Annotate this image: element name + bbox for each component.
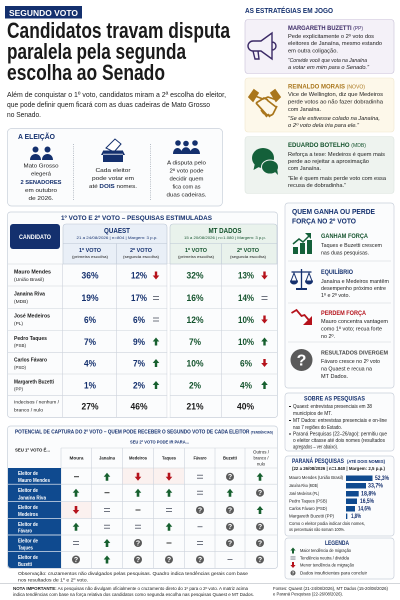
matrix row: eleitor de Mauro Mendes: ?: [228, 474, 232, 481]
panel: Margareth Buzetti: MARGARETH BUZETTI (PP): [288, 25, 363, 32]
panel: paraná pesquisas: (ATÉ DOIS NOMES): [347, 459, 386, 464]
icon: megaphone: [248, 33, 276, 59]
text: dois senadores: [20, 164, 62, 202]
row labels: Mauro Mendes: [18, 478, 50, 484]
matrix row: eleitor de Taques: ?: [228, 540, 232, 548]
ganham força: Taques e Buzetti crescem: [321, 243, 382, 249]
bar chart: Janaína Riva (MDB): [289, 483, 318, 489]
icon: question mark: [290, 349, 312, 371]
row: Carlos Fávaro: [14, 358, 268, 370]
panel: paraná pesquisas: [285, 456, 394, 536]
row: José Medeiros: 12%: [186, 315, 204, 326]
panel: sobre as pesquisas: Paraná Pesquisas (22–26/ago): permitiu que: [293, 432, 387, 438]
panel: paraná pesquisas: (22 a 26/08/2026 | n=1.840 | Margem: 2,5 p.p.): [292, 466, 385, 471]
sources: e Paraná Pesquisas (22-26/08/2026).: [273, 592, 343, 596]
important note: indica tendências com base na força relativa dos candidatos como segunda escolha nas pesquisas Quaest e MT Dados.: [13, 592, 254, 597]
panel: sobre as pesquisas: [285, 393, 394, 451]
text: a disputa: 2º voto pode: [170, 168, 204, 174]
text: a disputa: decidir quem: [170, 176, 204, 182]
row: Janaina Riva: 14%: [238, 293, 254, 304]
row: Pedro Taques: 10%: [238, 337, 254, 348]
observation note: nos resultados de 1º e 2º voto.: [18, 578, 88, 582]
panel: sobre as pesquisas: Quaest: entrevistas presenciais em 38: [293, 404, 372, 410]
matrix row: eleitor de Taques: ?: [136, 540, 140, 548]
observation note: Observação: cruzamentos não divulgados pelas pesquisas. Quadro indica tendências gerais com base: [18, 571, 248, 576]
ganham força: [321, 234, 382, 256]
quaest header: 1º VOTO: [79, 248, 102, 254]
matrix row: eleitor de Taques: [73, 539, 264, 548]
panel: Reinaldo Morais: com Janaína.: [288, 107, 321, 113]
column headers: Fávaro: [194, 456, 207, 460]
panel: Eduardo Botelho: EDUARDO BOTELHO (MDB): [288, 142, 366, 149]
matrix subheading: SEU 2º VOTO PODE IR PARA...: [130, 440, 189, 445]
text: cada eleitor: até DOIS nomes.: [89, 184, 137, 190]
panel: Eduardo Botelho: recusa de dobradinha.”: [288, 183, 346, 189]
row: José Medeiros: José Medeiros: [14, 314, 50, 320]
row: Carlos Fávaro: Carlos Fávaro: [14, 358, 47, 364]
row: Margareth Buzetti: 2%: [189, 380, 201, 391]
matrix row: eleitor de Buzetti: [72, 556, 264, 564]
bar chart: 52,3%: [375, 476, 390, 482]
row: Mauro Mendes: 12%: [131, 271, 147, 282]
panel: sobre as pesquisas: MT Dados: entrevistas presenciais e on-line: [293, 418, 387, 424]
bar chart: Pedro Taques (PSB): [289, 498, 327, 504]
row: Pedro Taques: Pedro Taques: [14, 336, 47, 342]
column headers: Janaína: [99, 456, 115, 460]
bar chart: José Medeiros (PL): [289, 491, 319, 497]
bar chart: 33,7%: [368, 484, 384, 490]
panel: legenda: [285, 538, 394, 579]
row: Mauro Mendes: 32%: [186, 271, 204, 282]
row: Mauro Mendes: [14, 270, 268, 283]
column headers: Taques: [162, 456, 176, 460]
mt dados header: 1º VOTO: [185, 248, 208, 254]
matrix row: eleitor de Buzetti: ?: [167, 557, 171, 564]
row: Janaina Riva: [14, 292, 268, 305]
row: Mauro Mendes: Mauro Mendes: [14, 270, 51, 276]
text: dois senadores: em outubro: [25, 188, 57, 194]
text: a disputa: A disputa pelo: [167, 160, 206, 166]
text: cada eleitor: [89, 168, 137, 190]
panel: Margareth Buzetti: em outra coligação.: [288, 48, 338, 54]
panel: Margareth Buzetti: [245, 20, 394, 74]
column headers: Outros /: [253, 450, 270, 454]
matrix row: eleitor de Medeiros: ?: [198, 508, 202, 514]
matrix row: eleitor de Janaina Riva: [73, 489, 264, 497]
resultados divergem: Fávaro cresce no 2º voto: [321, 358, 380, 365]
panel: sobre as pesquisas: municípios de MT.: [293, 411, 332, 417]
intro paragraph: [7, 90, 226, 119]
column headers: Buzetti: [223, 456, 237, 460]
row: indecisos: 21%: [186, 402, 204, 413]
row: Carlos Fávaro: 7%: [133, 359, 145, 370]
quaest header: 21 a 24/08/2026 | n=804 | Margem: 3 p.p.: [76, 236, 158, 240]
row: Pedro Taques: [14, 336, 268, 348]
perdem força: no 2º.: [321, 333, 335, 340]
panel: legenda: LEGENDA: [325, 541, 350, 547]
row: indecisos: 27%: [82, 402, 99, 413]
row: Carlos Fávaro: (PSD): [14, 365, 26, 370]
row labels: Eleitor de: [18, 538, 38, 544]
equilíbrio: [321, 268, 389, 299]
equilíbrio: 1º e 2º voto.: [321, 292, 350, 299]
panel: Reinaldo Morais: “Se ele estivesse colado na Janaína,: [288, 116, 380, 122]
heading: as estratégias em jogo: AS ESTRATÉGIAS EM JOGO: [245, 6, 333, 15]
intro paragraph: que pode definir quem ficará com as duas cadeiras de Mato Grosso: [7, 100, 210, 109]
matrix heading: POTENCIAL DE CAPTURA DO 2º VOTO – QUEM PODE RECEBER O SEGUNDO VOTO DE CADA ELEITOR (TENDÊNCIAS): [15, 430, 273, 436]
resultados divergem: [321, 351, 388, 380]
row: Mauro Mendes: 13%: [238, 271, 254, 282]
ganham força: GANHAM FORÇA: [321, 234, 369, 240]
matrix row: eleitor de Buzetti: ?: [198, 557, 202, 564]
bar chart: 18,8%: [361, 492, 377, 498]
panel heading: QUEM GANHA OU PERDE: [292, 207, 375, 216]
title: [7, 18, 230, 85]
panel: sobre as pesquisas: nas 7 regiões do Estado.: [293, 425, 342, 431]
row labels: Eleitor de: [18, 471, 38, 477]
row: Margareth Buzetti: Margareth Buzetti: [14, 379, 55, 385]
candidato header: [10, 224, 60, 249]
text: a disputa: duas cadeiras.: [166, 192, 206, 198]
table heading: 1º VOTO E 2º VOTO – PESQUISAS ESTIMULADAS: [61, 215, 213, 222]
intro paragraph: no Senado.: [7, 110, 41, 119]
row: Carlos Fávaro: 6%: [240, 359, 252, 370]
matrix row: eleitor de Buzetti: ?: [136, 557, 140, 564]
row: Pedro Taques: 9%: [133, 337, 145, 348]
matrix row: eleitor de Medeiros: [73, 506, 263, 514]
column headers: nulo: [257, 462, 265, 466]
matrix row: eleitor de Buzetti: ?: [258, 557, 262, 564]
panel: Margareth Buzetti: eleitores de Janaína, mesmo estando: [288, 41, 382, 47]
panel: sobre as pesquisas: agregados – ver abaixo).: [293, 444, 338, 450]
column headers: [70, 450, 270, 466]
bar chart note: [289, 521, 365, 533]
panel: Eduardo Botelho: [245, 136, 394, 194]
row: Margareth Buzetti: 4%: [240, 380, 252, 391]
row labels: Medeiros: [18, 512, 38, 518]
matrix row: eleitor de Janaina Riva: ?: [258, 490, 262, 497]
panel: Eduardo Botelho: “Ele é quem mais perde voto com essa: [288, 176, 387, 182]
mt dados header: (segunda escolha): [230, 255, 267, 259]
sources: Fontes: Quaest (21-24/08/2026), MT Dados (15-20/08/2026): [273, 586, 389, 591]
matrix row: eleitor de Medeiros: ?: [228, 508, 232, 514]
row: Carlos Fávaro: 4%: [84, 359, 96, 370]
text: dois senadores: de 2026.: [28, 196, 54, 202]
icon: handshake: [249, 90, 280, 117]
row labels: Eleitor de: [18, 522, 38, 528]
matrix row: eleitor de Mauro Mendes: [74, 473, 263, 481]
legend: dados insuficientes: ?: [292, 571, 295, 576]
panel: quem ganha ou perde: [285, 203, 394, 388]
row axis label: SEU 1º VOTO É...: [15, 446, 50, 454]
text: cada eleitor: pode votar em: [92, 176, 135, 182]
candidato header: CANDIDATO: [19, 235, 51, 241]
panel: Margareth Buzetti: a votar em mim para o Senado.”: [288, 65, 370, 71]
mt dados header: 2º VOTO: [237, 248, 260, 254]
column headers: branco /: [254, 456, 269, 460]
row labels: Eleitor de: [18, 488, 38, 494]
bar chart: 16,5%: [360, 499, 375, 505]
title: paralela pela segunda: [7, 39, 186, 64]
panel: Margareth Buzetti: Pede explicitamente o 2º voto dos: [288, 33, 374, 40]
row labels: Janaína Riva: [18, 496, 46, 502]
text: dois senadores: Mato Grosso: [24, 164, 58, 170]
important note: [13, 586, 254, 597]
important note: NOTA IMPORTANTE: As pesquisas não divulgam oficialmente o cruzamento direto do 1º para o 2º voto. A matriz acima: [13, 586, 249, 591]
row: José Medeiros: 10%: [238, 315, 254, 326]
row: Margareth Buzetti: 2%: [133, 380, 145, 391]
text: a disputa: [166, 160, 206, 198]
perdem força: como 1º voto; recua forte: [321, 326, 382, 332]
matrix row: eleitor de Buzetti: ?: [74, 557, 78, 564]
bar chart: 1,8%: [351, 514, 361, 520]
resultados divergem: RESULTADOS DIVERGEM: [321, 351, 388, 357]
quaest header: 2º VOTO: [130, 248, 153, 254]
mt dados header: MT DADOS: [208, 228, 242, 235]
bar chart: Margareth Buzetti (PP): [289, 514, 334, 520]
equilíbrio: EQUILÍBRIO: [321, 268, 353, 276]
panel: potencial de captura matrix: [8, 426, 278, 568]
row: indecisos: 40%: [237, 402, 254, 413]
mt dados header: 15 a 20/08/2026 | n=1.080 | Margem: 3 p.p.: [184, 236, 266, 240]
perdem força: [321, 311, 388, 340]
panel: Eduardo Botelho: Reforça a tese: Medeiros é quem mais: [288, 152, 385, 158]
icon: two people: [30, 146, 53, 160]
bar chart: Carlos Fávaro (PSD): [289, 506, 327, 512]
panel heading: FORÇA NO 2º VOTO: [292, 216, 356, 226]
icon: question mark: ?: [297, 352, 306, 370]
legend: menor tendência: Menor tendência de migração: [300, 562, 354, 568]
matrix row: eleitor de Taques: ?: [258, 540, 262, 548]
row: indecisos: Indecisos / nenhum /: [14, 400, 60, 406]
legend: neutra: Tendência neutra / dividida: [300, 556, 349, 562]
row: Mauro Mendes: (União Brasil): [14, 277, 44, 283]
row: Margareth Buzetti: 1%: [84, 380, 96, 391]
row: Janaina Riva: (MDB): [14, 299, 28, 305]
bar chart: 14,6%: [358, 506, 372, 512]
matrix row: eleitor de Fávaro: ?: [258, 524, 262, 531]
row: Carlos Fávaro: 10%: [186, 359, 204, 370]
text: dois senadores: 2 SENADORES: [20, 180, 62, 186]
row: Janaina Riva: 17%: [131, 293, 147, 304]
row: José Medeiros: 6%: [133, 315, 145, 326]
icon: three people: [173, 140, 200, 154]
panel: Eduardo Botelho: perde ao rejeitar a aproximação: [288, 159, 369, 165]
row: indecisos: [14, 400, 254, 414]
sources: [273, 586, 389, 596]
row: Janaina Riva: 19%: [82, 293, 99, 304]
text: a disputa: fica com as: [172, 184, 201, 190]
row labels: Eleitor de: [18, 505, 38, 511]
panel: a eleição: [8, 128, 222, 206]
panel: Reinaldo Morais: REINALDO MORAIS (NOVO): [288, 84, 365, 90]
perdem força: PERDEM FORÇA: [321, 311, 367, 317]
icon: chat bubbles: [252, 148, 278, 175]
matrix row: eleitor de Fávaro: ?: [228, 524, 232, 531]
observation note: [18, 571, 248, 582]
panel: sobre as pesquisas: o eleitor citasse até dois nomes (resultados: [293, 438, 385, 444]
panel: Reinaldo Morais: o 2º voto dela iria para ele.”: [288, 122, 360, 129]
panel: Reinaldo Morais: Vice de Wellington, diz que Medeiros: [288, 92, 383, 98]
resultados divergem: MT Dados.: [321, 374, 348, 380]
row: indecisos: branco / nulo: [14, 408, 43, 414]
panel: Reinaldo Morais: [245, 78, 394, 132]
quaest header: (primeira escolha): [72, 255, 109, 259]
ganham força: nas duas pesquisas.: [321, 250, 369, 256]
legend: maior tendência: Maior tendência de migração: [300, 548, 351, 554]
icon: scales: [290, 269, 312, 289]
quaest header: QUAEST: [104, 228, 131, 235]
panel: Reinaldo Morais: perde votos ao não fazer dobradinha: [288, 100, 384, 106]
row: José Medeiros: 6%: [84, 315, 96, 326]
mt dados header: [170, 224, 277, 264]
column headers: Moura: [70, 456, 84, 460]
row: Pedro Taques: (PSB): [14, 343, 26, 348]
row labels: Eleitor de: [18, 555, 38, 561]
perdem força: Mauro concentra vantagem: [321, 319, 388, 325]
row: Janaina Riva: 16%: [186, 293, 204, 304]
row: Margareth Buzetti: (PP): [14, 387, 24, 392]
row: Pedro Taques: 7%: [189, 337, 201, 348]
icon: growth chart: [293, 233, 312, 254]
equilíbrio: Janaína e Medeiros mantêm: [321, 279, 389, 285]
mt dados header: (primeira escolha): [178, 255, 215, 259]
icon: ballot box: [101, 139, 125, 162]
matrix row: eleitor de Fávaro: [73, 523, 264, 531]
icon: falling arrow: [292, 310, 312, 325]
row: Pedro Taques: 7%: [84, 337, 96, 348]
text: cada eleitor: Cada eleitor: [96, 168, 131, 174]
heading: a eleição: A ELEIÇÃO: [18, 132, 55, 141]
row labels: Buzetti: [18, 562, 33, 568]
bar chart: [289, 475, 390, 520]
row: Janaina Riva: Janaína Riva: [14, 292, 46, 298]
panel: Eduardo Botelho: com Janaína.: [288, 166, 321, 172]
bar chart note: os percentuais não somam 100%.: [289, 527, 345, 533]
bar chart: Mauro Mendes (União Brasil): [289, 475, 343, 481]
row: Mauro Mendes: 36%: [82, 271, 99, 282]
row: indecisos: 46%: [130, 402, 148, 413]
title: Candidatos travam disputa: [7, 18, 230, 43]
quaest header: (segunda escolha): [123, 255, 160, 259]
panel: sobre as pesquisas: SOBRE AS PESQUISAS: [304, 396, 366, 403]
equilíbrio: desempenho próximo entre: [321, 286, 386, 292]
row labels: [8, 468, 61, 568]
row: José Medeiros: [14, 314, 268, 326]
row labels: Fávaro: [18, 528, 32, 534]
text: dois senadores: elegerá: [31, 172, 51, 178]
bar chart note: Como o eleitor podia indicar dois nomes,: [289, 521, 365, 527]
row: Margareth Buzetti: [14, 379, 268, 392]
row: José Medeiros: (PL): [14, 321, 24, 326]
legend: dados insuficientes: Dados insuficientes para concluir: [300, 570, 367, 576]
quaest header: [63, 224, 167, 264]
panel: pesquisas estimuladas table: [8, 212, 278, 418]
column headers: Medeiros: [129, 456, 147, 460]
row labels: Taques: [18, 546, 33, 552]
section tag: SEGUNDO VOTO: [9, 8, 78, 18]
intro paragraph: Além de conquistar o 1º voto, candidatos miram a 2ª escolha do eleitor,: [7, 90, 226, 99]
panel: paraná pesquisas: PARANÁ PESQUISAS: [292, 456, 345, 465]
panel heading: [292, 207, 375, 226]
resultados divergem: na Quaest e recua na: [321, 366, 373, 372]
panel: Margareth Buzetti: “Convide você que vota na Janaína: [288, 58, 368, 64]
title: escolha ao Senado: [7, 60, 165, 85]
